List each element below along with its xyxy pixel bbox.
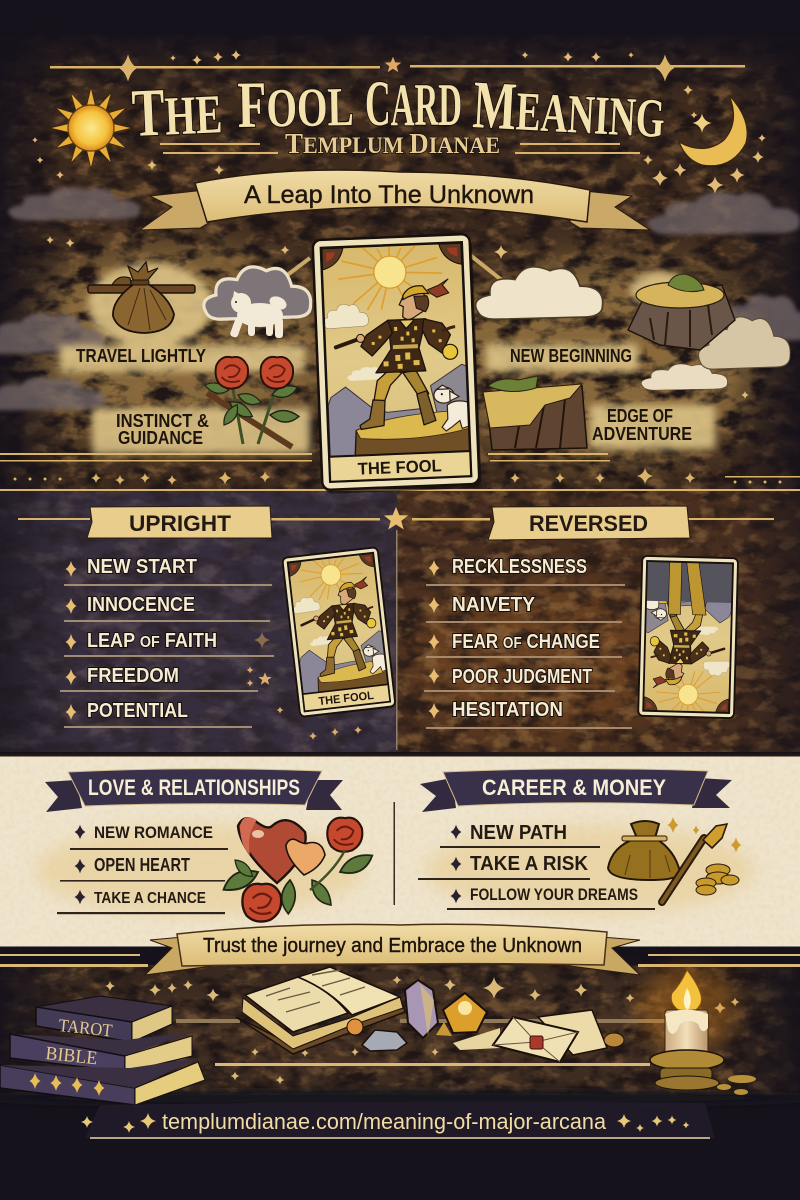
upright heading: UPRIGHT [129, 511, 232, 536]
main tarot card [313, 234, 482, 494]
icon: crystals [362, 980, 487, 1051]
upright heading [18, 506, 380, 538]
top ornament line [50, 54, 745, 82]
labels: symbol captions: ADVENTURE [592, 424, 692, 444]
icon: cliff top right [628, 274, 735, 350]
list: career: FOLLOW YOUR DREAMS [470, 885, 638, 904]
section lines and star row [0, 453, 800, 491]
reversed card [638, 556, 738, 718]
title [130, 66, 667, 152]
book: tarot: TAROT [58, 1015, 113, 1041]
list: love: TAKE A CHANCE [94, 890, 206, 907]
ribbon: closing message: Trust the journey and Embrace the Unknown [203, 935, 582, 957]
icon: candle [637, 966, 756, 1095]
icon: open book [236, 967, 405, 1054]
upright list: LEAP OF FAITH [87, 630, 217, 652]
bottom gold lines [0, 954, 800, 967]
banner: love and relationships [45, 769, 343, 812]
title: FOOL [237, 67, 354, 142]
list: career [418, 822, 655, 910]
upright card [282, 547, 396, 717]
stars by upright card [246, 632, 362, 740]
list: career: NEW PATH [470, 822, 567, 844]
shelf line and stars [105, 976, 740, 1084]
main tarot card: THE FOOL [357, 456, 442, 479]
reversed heading [412, 506, 774, 540]
book: stars [0, 1058, 205, 1105]
upright list: POTENTIAL [87, 700, 188, 722]
rays behind main card [274, 255, 508, 285]
footer URL [81, 1102, 715, 1139]
title: THE [130, 71, 224, 151]
icon: stacked books [0, 996, 205, 1105]
reversed list [424, 556, 632, 729]
icon: money bag and wand [608, 817, 741, 902]
icon: roses and stick [204, 357, 300, 447]
subtitle: TEMPLUM DIANAE [285, 129, 500, 160]
labels: symbol captions: INSTINCT & [116, 411, 209, 431]
upright list: INNOCENCE [87, 594, 195, 616]
reversed list: POOR JUDGMENT [452, 666, 592, 688]
labels: symbol captions: NEW BEGINNING [510, 346, 632, 366]
icon: crescent moon [679, 95, 747, 166]
labels: symbol captions [76, 346, 692, 448]
banner: love and relationships: LOVE & RELATIONSHIPS [88, 775, 300, 800]
title: MEANING [471, 66, 667, 152]
ribbon: closing message [145, 924, 640, 975]
ribbon: tagline [140, 170, 650, 230]
upright card: THE FOOL [318, 690, 375, 708]
panel: love and career [0, 754, 800, 946]
labels: symbol captions: GUIDANCE [118, 428, 203, 448]
reversed heading: REVERSED [529, 511, 648, 536]
labels: symbol captions: TRAVEL LIGHTLY [76, 346, 206, 366]
list: career: TAKE A RISK [470, 853, 589, 875]
reversed list: HESITATION [452, 699, 563, 721]
list: love: OPEN HEART [94, 855, 190, 875]
icon: sun [50, 87, 132, 169]
reversed list: RECKLESSNESS [452, 556, 587, 578]
upright list: FREEDOM [87, 665, 179, 687]
upright list: NEW START [87, 556, 197, 578]
panel: upright [18, 506, 396, 740]
list: love: NEW ROMANCE [94, 823, 213, 842]
icon: hearts and roses [220, 817, 376, 922]
ribbon: tagline: A Leap Into The Unknown [244, 181, 534, 209]
banner: career and money: CAREER & MONEY [482, 775, 666, 800]
labels: symbol captions: EDGE OF [607, 406, 673, 426]
title: CARD [365, 68, 462, 140]
centre star and divider [384, 507, 408, 750]
banner: career and money [420, 769, 732, 812]
icon: envelope and letter [453, 1010, 624, 1062]
icon: bindle [88, 262, 195, 333]
upright list [60, 556, 274, 728]
icon: white dog [229, 291, 289, 338]
book: bible: BIBLE [44, 1043, 98, 1069]
clouds beside card [204, 267, 790, 390]
reversed list: FEAR OF CHANGE [452, 631, 600, 653]
book: tarot [36, 996, 172, 1042]
panel: reversed [412, 506, 774, 729]
reversed list: NAIVETY [452, 594, 536, 616]
list: love [57, 823, 228, 914]
footer URL: templumdianae.com/meaning-of-major-arcana [162, 1109, 607, 1134]
book: bible [10, 1032, 192, 1072]
icon: cliff centre right [483, 376, 587, 450]
scattered stars: header [32, 50, 774, 399]
